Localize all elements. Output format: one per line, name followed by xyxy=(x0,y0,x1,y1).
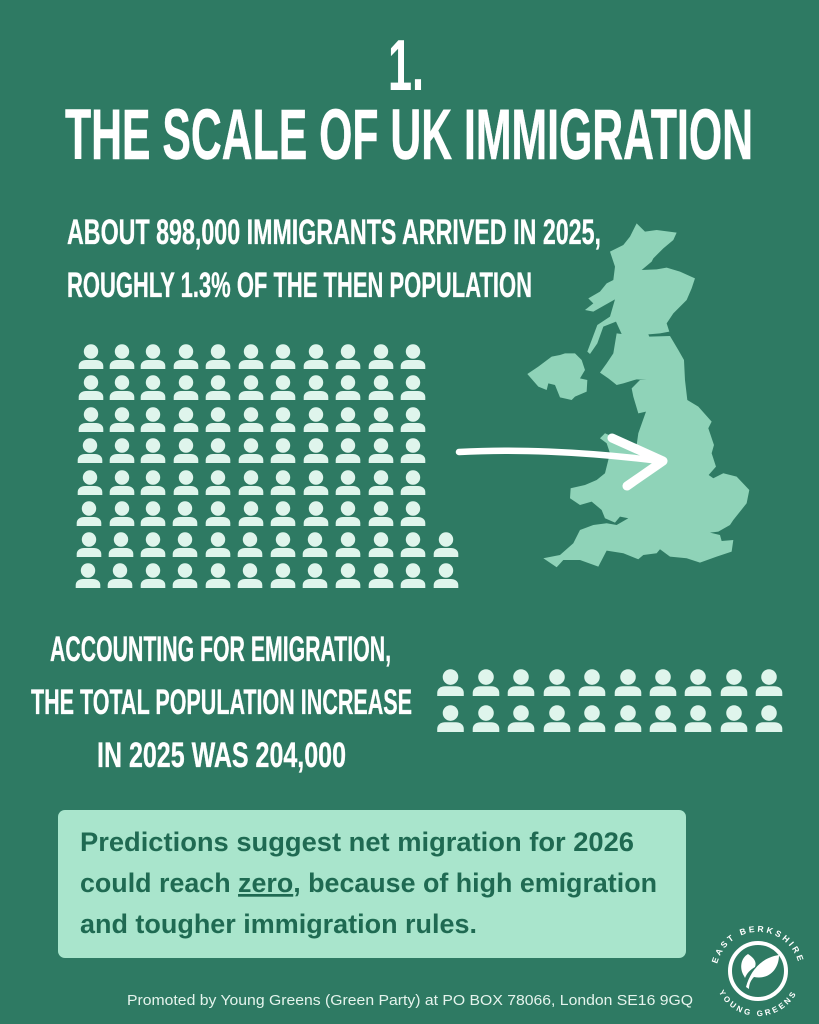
logo: East Berkshire Young Greens: YOUNG GREENS xyxy=(720,989,796,1016)
callout: predictions: and tougher immigration rules. xyxy=(80,909,477,939)
icon: leaves xyxy=(741,954,779,989)
text block: arrivals xyxy=(67,212,601,305)
map: United Kingdom xyxy=(527,223,749,567)
callout: predictions: could reach zero, because of high emigration xyxy=(80,868,657,898)
callout: predictions: Predictions suggest net migration for 2026 xyxy=(80,827,634,857)
text block: emigration: THE TOTAL POPULATION INCREASE xyxy=(31,682,412,722)
logo: East Berkshire Young Greens xyxy=(712,926,804,1016)
logo: East Berkshire Young Greens: EAST BERKSHIRE xyxy=(712,926,804,964)
callout: predictions xyxy=(58,810,686,958)
arrow xyxy=(459,438,663,486)
icon grid: net population increase xyxy=(437,669,782,732)
text block: emigration xyxy=(31,629,412,775)
title: 1. xyxy=(388,26,424,106)
footer: imprint: Promoted by Young Greens (Green Party) at PO BOX 78066, London SE16 9GQ xyxy=(127,993,693,1009)
map: Northern Ireland xyxy=(527,353,587,400)
text block: emigration: ACCOUNTING FOR EMIGRATION, xyxy=(50,629,391,669)
title xyxy=(65,26,753,175)
text block: arrivals: ROUGHLY 1.3% OF THE THEN POPULATION xyxy=(67,265,532,305)
map: Great Britain xyxy=(543,223,749,567)
icon grid: people arrivals xyxy=(76,344,458,588)
text block: emigration: IN 2025 WAS 204,000 xyxy=(97,735,346,775)
